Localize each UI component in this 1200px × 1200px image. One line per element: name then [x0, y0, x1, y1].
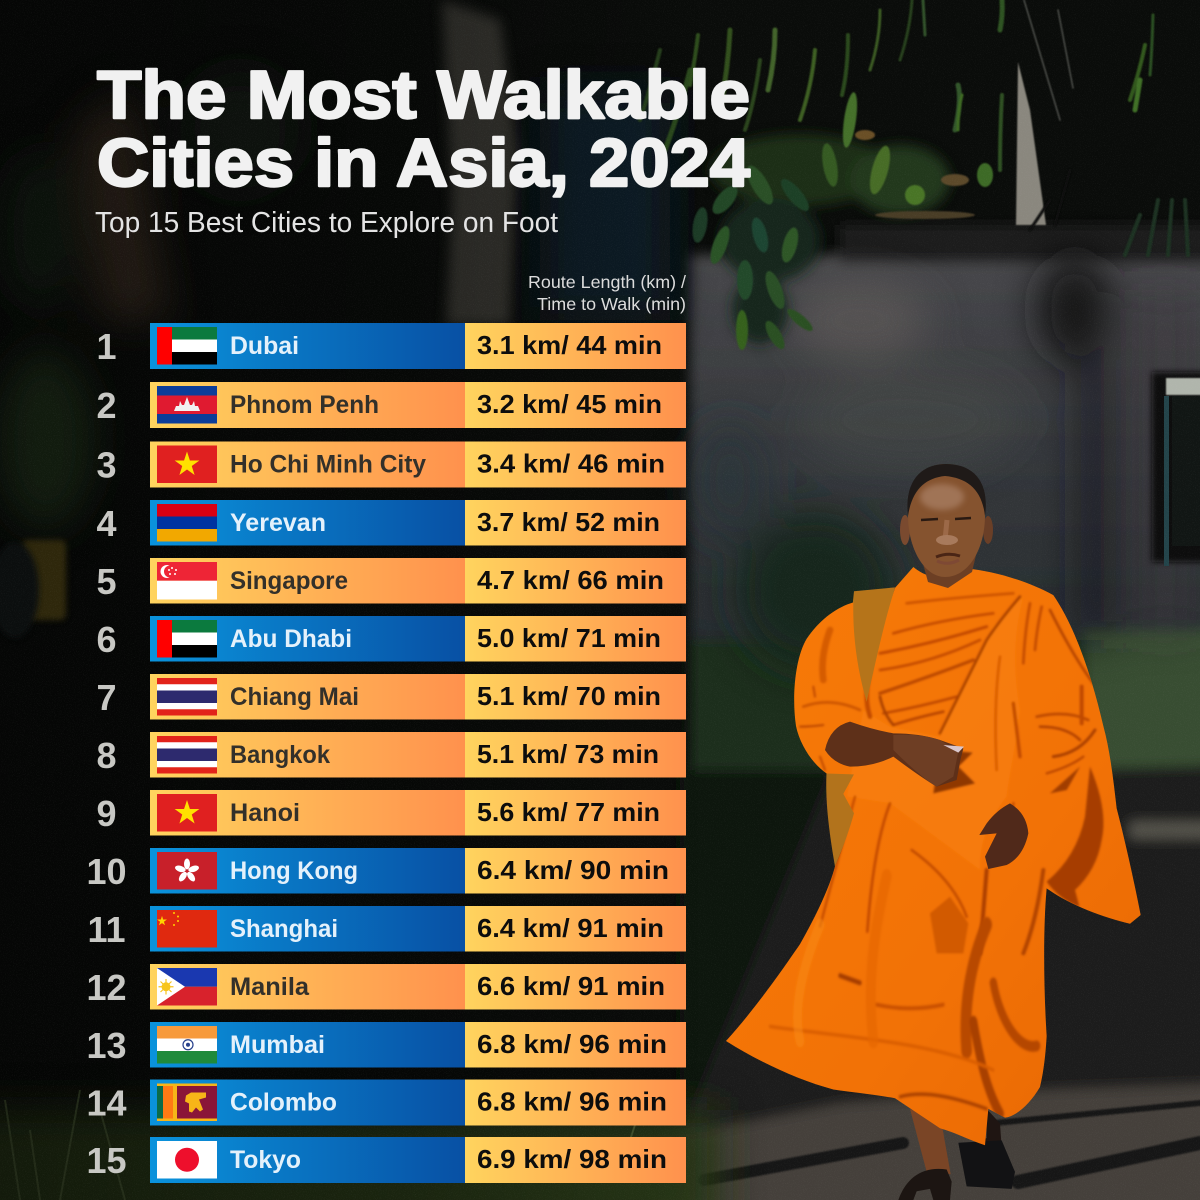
row 10: Hong Kong — [86, 848, 686, 894]
flag: UAE — [157, 620, 217, 658]
row 15: Tokyo: 15 — [86, 1140, 127, 1181]
robe folds and highlights — [770, 593, 1103, 1114]
row 7: Chiang Mai — [96, 674, 686, 720]
row 1: Dubai — [96, 323, 686, 369]
row 1: Dubai: Dubai — [230, 332, 299, 360]
left fade — [0, 0, 700, 1200]
row 4: Yerevan: 3.7 km/ 52 min — [477, 507, 660, 537]
column header: Time to Walk (min) — [537, 294, 686, 314]
row 5: Singapore: 4.7 km/ 66 min — [477, 565, 664, 595]
flag: Vietnam — [157, 794, 217, 832]
row 2: Phnom Penh — [96, 382, 686, 428]
row 14: Colombo: 6.8 km/ 96 min — [477, 1086, 667, 1116]
wall patches — [690, 255, 1200, 670]
row 6: Abu Dhabi — [96, 616, 686, 662]
row 2: Phnom Penh: Phnom Penh — [230, 391, 379, 419]
column — [1016, 62, 1046, 225]
row 15: Tokyo: 6.9 km/ 98 min — [477, 1144, 667, 1174]
flag: Cambodia — [157, 386, 217, 424]
row 11: Shanghai: 11 — [87, 909, 126, 950]
flag: Japan — [157, 1141, 217, 1178]
row 8: Bangkok: 5.1 km/ 73 min — [477, 739, 659, 769]
row 14: Colombo: 14 — [86, 1082, 127, 1124]
bag and strap — [826, 587, 895, 867]
flag: Philippines — [157, 968, 217, 1006]
row 9: Hanoi: 5.6 km/ 77 min — [477, 797, 660, 827]
row 8: Bangkok: 8 — [96, 735, 117, 776]
row 5: Singapore: 5 — [96, 561, 117, 602]
row 2: Phnom Penh: 3.2 km/ 45 min — [477, 389, 662, 419]
row 10: Hong Kong: 6.4 km/ 90 min — [477, 855, 669, 885]
row 6: Abu Dhabi: Abu Dhabi — [230, 625, 352, 653]
feet and sandals — [898, 1109, 1015, 1200]
row 9: Hanoi: Hanoi — [230, 799, 300, 827]
row 11: Shanghai: 6.4 km/ 91 min — [477, 913, 664, 943]
row 9: Hanoi — [96, 790, 686, 836]
row 12: Manila: Manila — [230, 973, 310, 1001]
flag: UAE — [157, 327, 217, 364]
left arm and hand — [825, 722, 975, 793]
row 1: Dubai: 3.1 km/ 44 min — [477, 330, 662, 360]
row 12: Manila — [86, 964, 686, 1010]
row 13: Mumbai: Mumbai — [230, 1031, 325, 1059]
row 4: Yerevan — [96, 500, 686, 546]
robe — [726, 567, 1141, 1145]
tree trunk — [442, 0, 518, 325]
flag: Armenia — [157, 504, 217, 542]
left tree and greens — [0, 70, 720, 1200]
row 7: Chiang Mai: 5.1 km/ 70 min — [477, 681, 661, 711]
flag: Thailand — [157, 736, 217, 774]
column header — [528, 272, 686, 314]
row 5: Singapore: Singapore — [230, 567, 348, 595]
row 7: Chiang Mai: 7 — [96, 677, 117, 718]
row 13: Mumbai — [86, 1022, 686, 1068]
flag: Singapore — [157, 562, 217, 600]
row 14: Colombo — [86, 1080, 686, 1126]
row 3: Ho Chi Minh City — [96, 442, 686, 488]
row 12: Manila: 12 — [86, 967, 127, 1008]
dark blue tree behind — [540, 90, 670, 320]
row 15: Tokyo: Tokyo — [230, 1146, 301, 1174]
title — [97, 57, 750, 201]
flag: China — [157, 910, 217, 948]
row 8: Bangkok — [96, 732, 686, 778]
row 12: Manila: 6.6 km/ 91 min — [477, 971, 665, 1001]
flag: Vietnam — [157, 446, 217, 483]
row 9: Hanoi: 9 — [96, 793, 117, 834]
row 8: Bangkok: Bangkok — [230, 741, 330, 769]
row 1: Dubai: 1 — [96, 326, 117, 367]
flag: Sri Lanka — [157, 1084, 217, 1121]
row 13: Mumbai: 13 — [86, 1025, 127, 1066]
column header: Route Length (km) / — [528, 272, 686, 292]
row 3: Ho Chi Minh City: 3 — [96, 444, 117, 486]
flag: Thailand — [157, 678, 217, 716]
row 14: Colombo: Colombo — [230, 1088, 337, 1116]
row 6: Abu Dhabi: 5.0 km/ 71 min — [477, 623, 661, 653]
row 11: Shanghai — [87, 906, 686, 952]
row 7: Chiang Mai: Chiang Mai — [230, 683, 359, 711]
row 2: Phnom Penh: 2 — [96, 385, 117, 426]
monk figure — [726, 464, 1141, 1200]
row 10: Hong Kong: 10 — [86, 851, 127, 892]
flag: India — [157, 1026, 217, 1064]
ranking table — [86, 323, 686, 1183]
row 6: Abu Dhabi: 6 — [96, 619, 117, 660]
title: Cities in Asia, 2024 — [97, 125, 750, 201]
row 3: Ho Chi Minh City: 3.4 km/ 46 min — [477, 448, 665, 478]
head — [900, 464, 993, 588]
right hand — [979, 803, 1028, 869]
row 15: Tokyo — [86, 1137, 686, 1183]
hanging tree leaves — [690, 91, 993, 352]
row 13: Mumbai: 6.8 km/ 96 min — [477, 1029, 667, 1059]
row 4: Yerevan: Yerevan — [230, 509, 326, 537]
subtitle: Top 15 Best Cities to Explore on Foot — [95, 207, 558, 239]
row 10: Hong Kong: Hong Kong — [230, 857, 358, 885]
title: The Most Walkable — [97, 57, 750, 133]
far background: wall, roof, grass and road — [640, 225, 1200, 1200]
palm fronds — [640, 0, 1188, 255]
row 3: Ho Chi Minh City: Ho Chi Minh City — [230, 450, 426, 478]
row 11: Shanghai: Shanghai — [230, 915, 338, 943]
window — [1152, 372, 1200, 566]
row 4: Yerevan: 4 — [96, 503, 117, 544]
road shadow stripes — [704, 1103, 1200, 1182]
row 5: Singapore — [96, 558, 686, 604]
flag: Hong Kong — [157, 852, 217, 890]
